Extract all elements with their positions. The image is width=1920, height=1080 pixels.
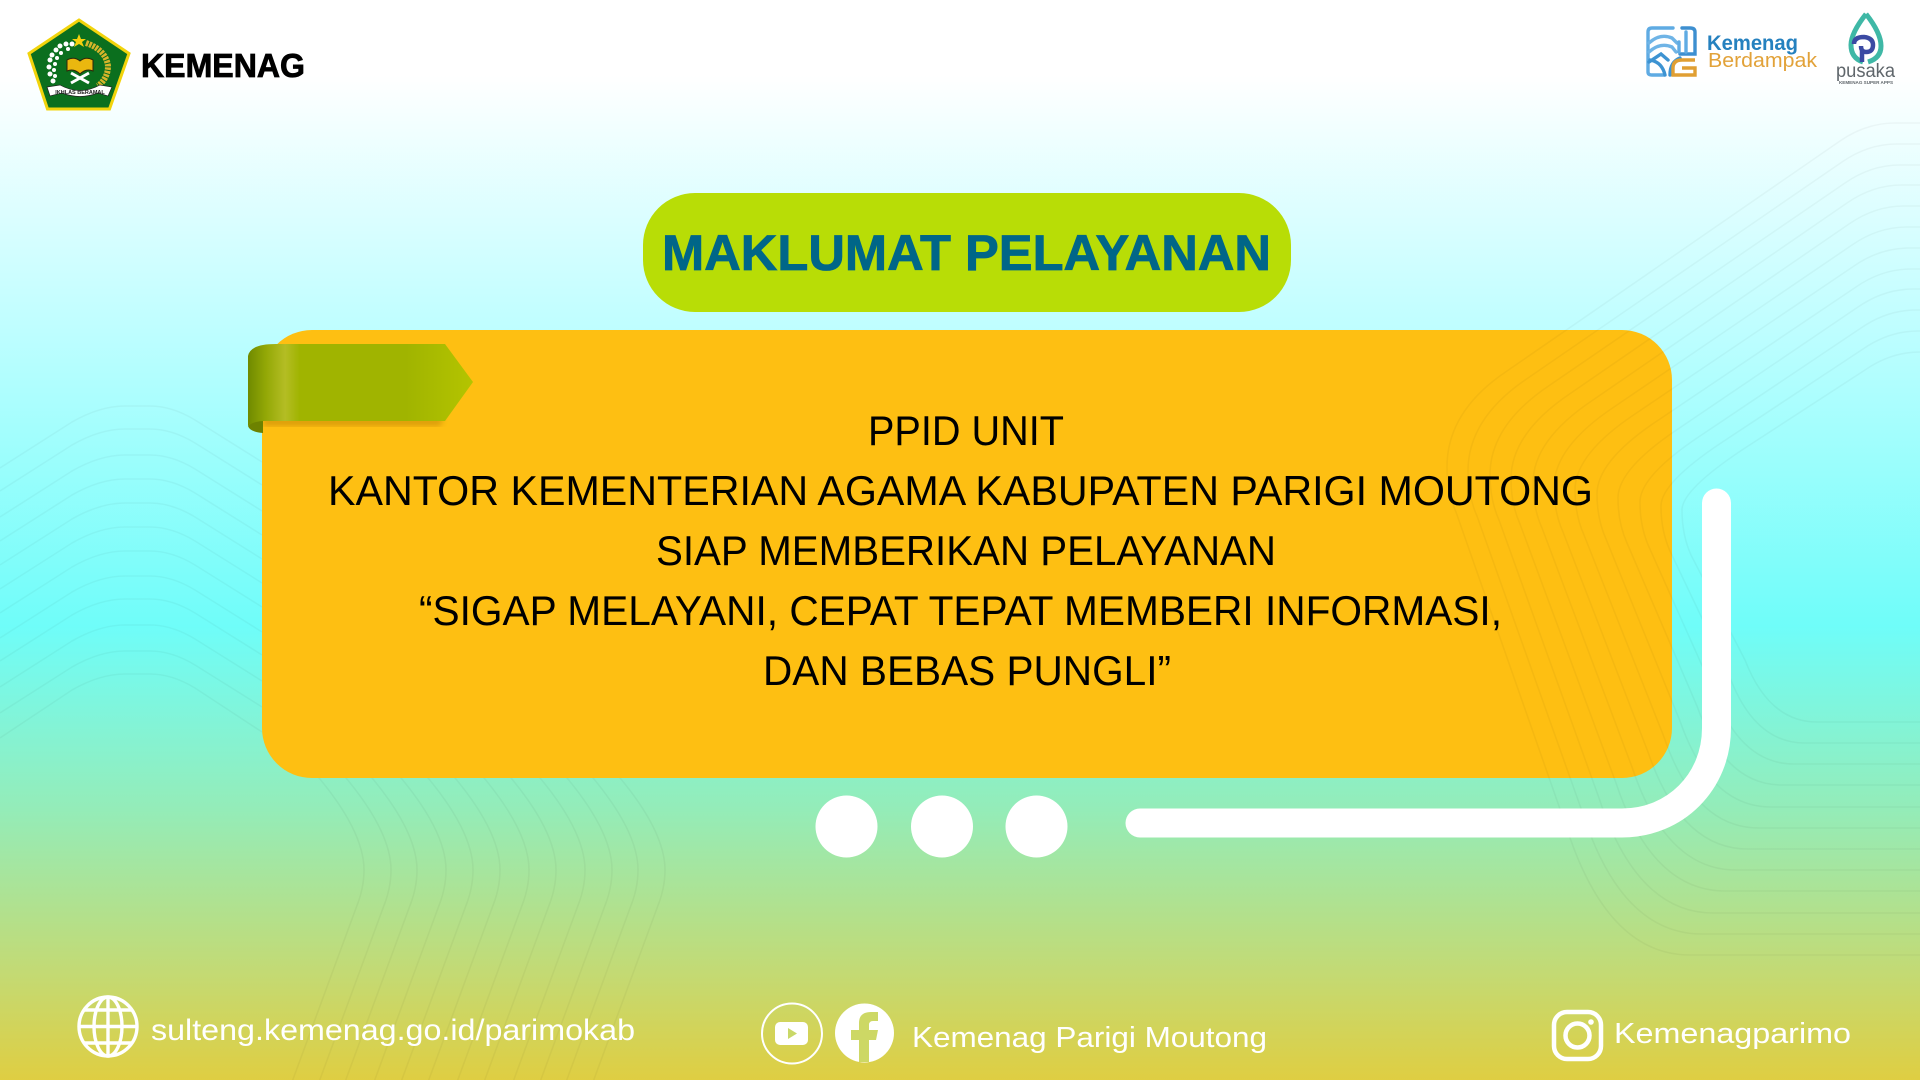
ribbon xyxy=(248,344,473,433)
website text: sulteng.kemenag.go.id/parimokab xyxy=(151,1014,635,1047)
emblem open book xyxy=(67,58,93,74)
line 2: KANTOR KEMENTERIAN AGAMA KABUPATEN PARIGI MOUTONG xyxy=(328,467,1593,514)
emblem crossed stand xyxy=(71,73,89,83)
ribbon underside xyxy=(248,420,263,433)
white rounded connector xyxy=(1140,503,1716,823)
line 1: PPID UNIT xyxy=(868,407,1064,454)
title pill xyxy=(643,193,1291,312)
logo: Pusaka xyxy=(1836,14,1895,85)
emblem shield xyxy=(29,20,129,109)
footer: youtube and facebook xyxy=(762,1004,1267,1064)
pusaka word: pusaka xyxy=(1836,61,1895,82)
line 4: “SIGAP MELAYANI, CEPAT TEPAT MEMBERI INFORMASI, xyxy=(419,587,1502,634)
emblem ribbon xyxy=(47,85,112,96)
wordmark bottom: Berdampak xyxy=(1708,50,1818,72)
logo: Kemenag Berdampak xyxy=(1648,28,1818,75)
logo: Kemenag emblem xyxy=(29,20,129,109)
icon: facebook xyxy=(835,1004,894,1062)
drop outline xyxy=(1851,14,1881,62)
ribbon shadow xyxy=(263,418,444,426)
line 5: DAN BEBAS PUNGLI” xyxy=(763,647,1171,694)
emblem motto: IKHLAS BERAMAL xyxy=(55,90,105,96)
icon: instagram xyxy=(1554,1012,1601,1059)
panel text xyxy=(328,407,1593,694)
wordmark top: Kemenag xyxy=(1707,32,1798,55)
icon: globe xyxy=(79,997,137,1056)
contour lines: left xyxy=(0,406,262,738)
icon: orange lines xyxy=(1673,60,1695,75)
footer: website xyxy=(79,997,635,1056)
instagram name: Kemenagparimo xyxy=(1614,1018,1851,1050)
emblem jasmine wreath xyxy=(46,42,74,84)
title text: MAKLUMAT PELAYANAN xyxy=(662,225,1271,281)
brand name: KEMENAG xyxy=(141,47,305,84)
three white dots xyxy=(816,796,1068,858)
ribbon body xyxy=(248,344,473,426)
emblem wheat xyxy=(86,43,108,86)
contour lines: right xyxy=(1447,123,1920,955)
footer: instagram xyxy=(1554,1012,1851,1059)
main yellow panel xyxy=(262,330,1672,778)
icon: blue lines xyxy=(1648,28,1695,75)
facebook name: Kemenag Parigi Moutong xyxy=(912,1022,1267,1054)
icon: youtube xyxy=(762,1004,822,1064)
emblem star xyxy=(72,34,86,47)
pusaka tagline: KEMENAG SUPER APPS xyxy=(1839,80,1893,85)
line 3: SIAP MEMBERIKAN PELAYANAN xyxy=(656,527,1276,574)
spiral xyxy=(1854,37,1873,62)
contour lines: bottom xyxy=(292,772,665,1080)
